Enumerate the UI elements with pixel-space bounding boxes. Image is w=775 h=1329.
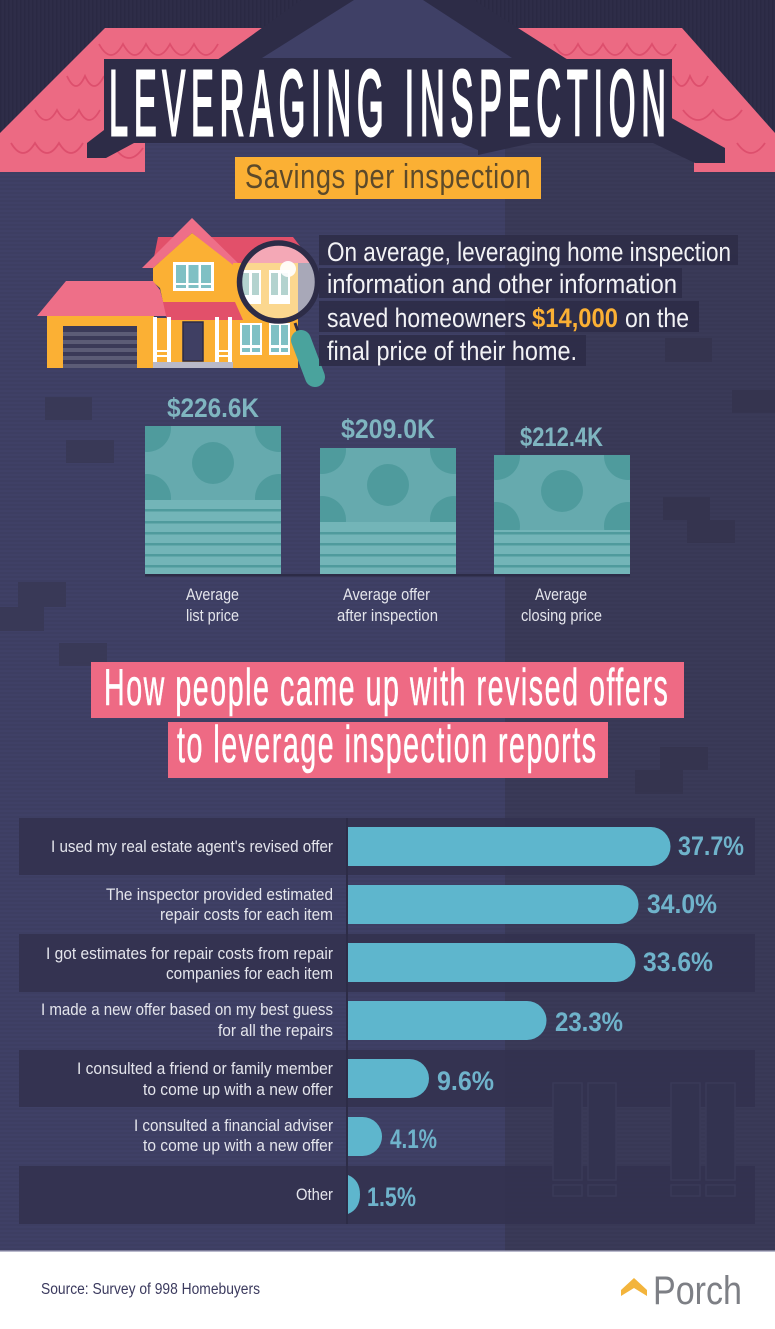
bar: average offer after inspection (320, 418, 456, 624)
row: other (296, 1175, 416, 1214)
text block: average savings: final price of their home. (327, 336, 577, 366)
logo: Porch: Porch (653, 1269, 742, 1313)
row: real estate agent: 37.7% (678, 831, 744, 861)
source note: Source: Survey of 998 Homebuyers (41, 1281, 260, 1298)
roof: centre gable and beams (87, 0, 725, 163)
heading: revised offers: How people came up with revised offers (104, 658, 668, 716)
roof: right pink section (514, 28, 775, 172)
bar: average offer after inspection: Average offer (343, 585, 430, 604)
bar: average closing price: closing price (521, 606, 602, 625)
row: best guess: for all the repairs (218, 1022, 333, 1040)
bar: average closing price: Average (535, 585, 587, 604)
bar: average closing price (494, 426, 630, 624)
text block: average savings: on the (625, 303, 689, 333)
chart: price bars (145, 397, 630, 624)
bar: average offer after inspection: $209.0K (341, 414, 435, 444)
text block: average savings: saved homeowners (327, 303, 526, 333)
bar: average closing price: $212.4K (520, 422, 603, 452)
row: repair companies: I got estimates for repair costs from repair (46, 945, 333, 963)
heading: revised offers: to leverage inspection reports (177, 715, 596, 773)
icon: house with magnifying glass (37, 218, 328, 377)
row: friend or family: I consulted a friend or family member (77, 1060, 333, 1078)
title: LEVERAGING INSPECTION (109, 51, 666, 155)
row: best guess: 23.3% (555, 1007, 623, 1037)
row: real estate agent (51, 827, 744, 866)
footer (0, 1250, 775, 1329)
row: other: 1.5% (367, 1182, 416, 1212)
bar: average list price: list price (186, 606, 239, 625)
bar: average list price (145, 397, 281, 624)
row: financial adviser (134, 1117, 437, 1156)
row: best guess (41, 1001, 623, 1040)
row: inspector: The inspector provided estimated (106, 886, 333, 904)
text block: average savings: information and other information (327, 269, 677, 299)
row: best guess: I made a new offer based on my best guess (41, 1001, 333, 1019)
row: financial adviser: I consulted a financial adviser (134, 1117, 333, 1135)
subtitle: Savings per inspection (245, 157, 531, 196)
bar: average list price: Average (186, 585, 239, 604)
row: friend or family: to come up with a new offer (143, 1081, 333, 1099)
bar: average list price: $226.6K (167, 393, 259, 423)
row: inspector: repair costs for each item (160, 906, 333, 924)
text block: average savings (319, 235, 738, 366)
row: inspector (106, 885, 717, 924)
row: friend or family (77, 1059, 494, 1099)
logo: Porch (621, 1269, 742, 1313)
row: friend or family: 9.6% (437, 1066, 494, 1096)
roof: left pink section (0, 28, 262, 172)
row: financial adviser: to come up with a new offer (143, 1137, 333, 1155)
chart: how people came up with revised offers (19, 818, 755, 1224)
row: other: Other (296, 1186, 333, 1204)
row: inspector: 34.0% (647, 889, 717, 919)
row: financial adviser: 4.1% (390, 1124, 437, 1154)
row: repair companies: companies for each item (166, 965, 333, 983)
bar: average offer after inspection: after inspection (337, 606, 438, 625)
text block: average savings: $14,000 (532, 303, 618, 333)
heading: revised offers (91, 658, 684, 778)
row: real estate agent: I used my real estate agent's revised offer (51, 838, 333, 856)
row: repair companies: 33.6% (643, 947, 713, 977)
row: repair companies (46, 943, 713, 983)
